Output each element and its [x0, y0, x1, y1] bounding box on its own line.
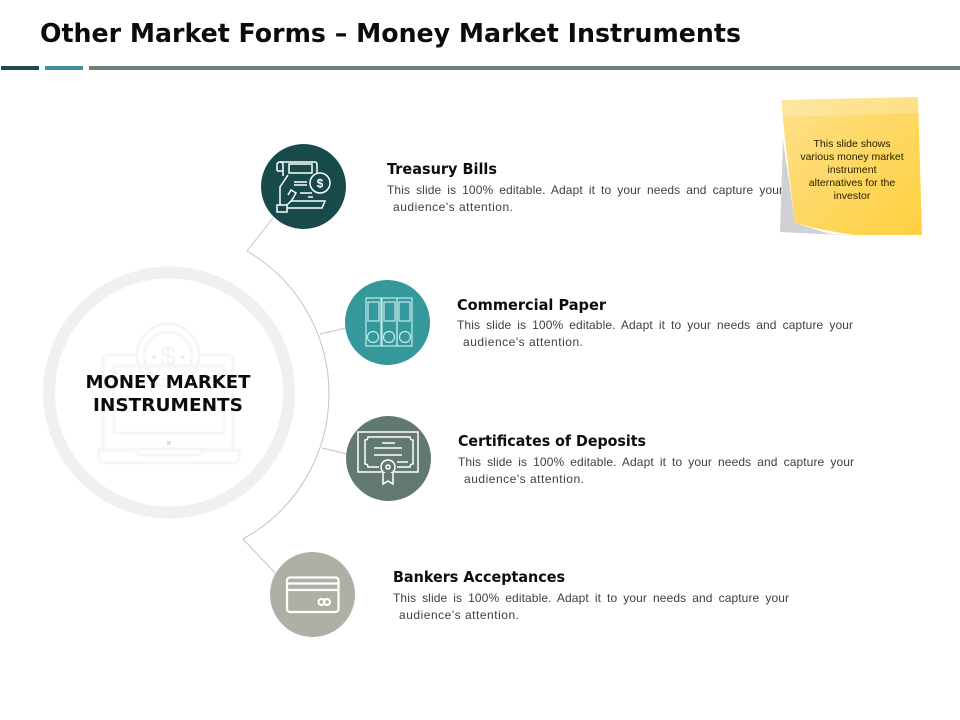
heading: Treasury Bills [387, 160, 497, 178]
note text: alternatives for the [809, 177, 895, 189]
icon: binders [345, 280, 430, 365]
description: This slide is 100% editable. Adapt it to your needs and capture your [393, 591, 789, 605]
icon: bill in hand [261, 144, 346, 229]
description: audience's attention. [463, 335, 583, 349]
note text: investor [834, 190, 871, 202]
central circle [49, 272, 289, 512]
icon: faded laptop with dollar coin [99, 324, 239, 463]
outer ring [49, 272, 289, 512]
central label: MONEY MARKET [86, 372, 251, 393]
icon: certificate [346, 416, 431, 501]
note text: various money market [800, 151, 904, 163]
note body [781, 97, 922, 235]
description [387, 183, 783, 214]
note top band [781, 97, 918, 117]
item: Bankers Acceptances [270, 552, 789, 637]
note shadow [780, 140, 860, 236]
icon: credit card [270, 552, 355, 637]
heading: Certificates of Deposits [458, 432, 646, 450]
description: audience's attention. [464, 472, 584, 486]
description [457, 318, 853, 349]
description: This slide is 100% editable. Adapt it to your needs and capture your [457, 318, 853, 332]
description [393, 591, 789, 622]
sticky note [780, 97, 922, 236]
heading: Commercial Paper [457, 296, 607, 314]
icon: faded laptop with dollar coin: $ [160, 341, 176, 372]
central label [86, 372, 251, 416]
note text: This slide shows [813, 138, 891, 150]
description: audience's attention. [393, 200, 513, 214]
item: Commercial Paper [345, 280, 853, 365]
connector arc and lines [243, 218, 347, 573]
description: This slide is 100% editable. Adapt it to your needs and capture your [387, 183, 783, 197]
description [458, 455, 854, 486]
item: Treasury Bills [261, 144, 783, 229]
description: This slide is 100% editable. Adapt it to your needs and capture your [458, 455, 854, 469]
note text [800, 138, 904, 202]
heading: Bankers Acceptances [393, 568, 565, 586]
description: audience's attention. [399, 608, 519, 622]
item: Certificates of Deposits [346, 416, 854, 501]
header rule [1, 66, 960, 70]
title: Other Market Forms – Money Market Instruments [40, 19, 741, 49]
central label: INSTRUMENTS [93, 395, 243, 416]
icon: bill in hand: $ [317, 176, 324, 190]
note text: instrument [827, 164, 877, 176]
